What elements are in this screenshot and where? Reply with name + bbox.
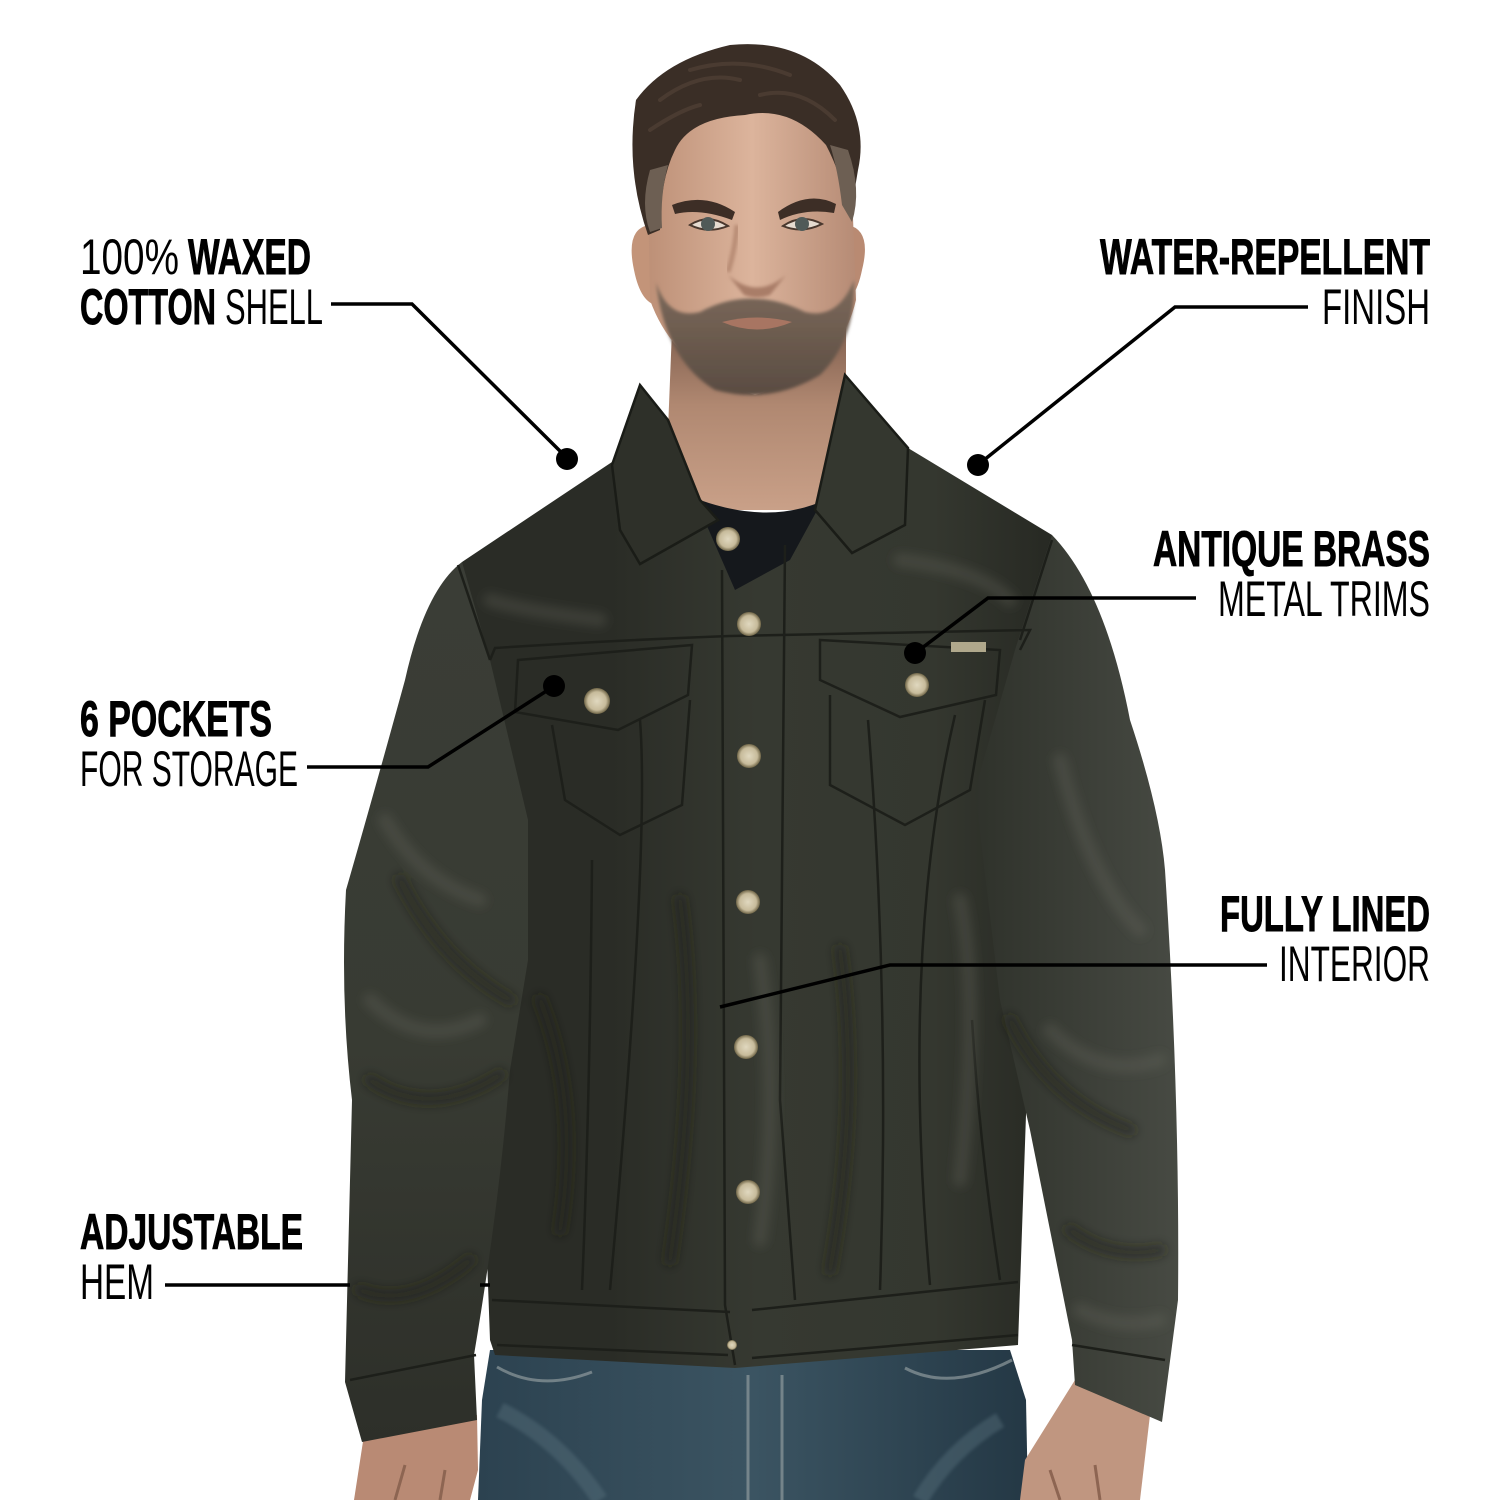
callout: 100% waxed cotton shell: COTTON: [80, 279, 216, 335]
callout: adjustable hem: [80, 1204, 490, 1310]
nose: [728, 225, 786, 298]
callout: 100% waxed cotton shell: [80, 229, 578, 470]
brand tag: [951, 642, 986, 652]
callout: antique brass metal trims: [904, 521, 1430, 664]
callout: adjustable hem: ADJUSTABLE: [80, 1204, 303, 1260]
hair: [632, 44, 861, 235]
right sleeve: [975, 535, 1178, 1422]
callout: fully lined interior: [720, 886, 1430, 1007]
yoke, placket and pocket stitching: [350, 540, 1165, 1380]
left sleeve: [344, 562, 528, 1442]
hands: [354, 1380, 1150, 1500]
callout: 6 pockets for storage: 6 POCKETS: [80, 691, 272, 747]
callout: 6 pockets for storage: [80, 675, 565, 797]
eyes and brows: [672, 199, 836, 231]
callout: water-repellent finish: [967, 229, 1430, 476]
callout: 100% waxed cotton shell: 100%: [80, 229, 179, 285]
collar: [612, 375, 908, 564]
callout: water-repellent finish: FINISH: [1322, 279, 1430, 335]
jeans: [478, 1350, 1028, 1500]
ears: [632, 225, 865, 306]
illustration: man wearing waxed jacket: [344, 44, 1178, 1500]
brass buttons: [584, 527, 929, 1350]
neck: [668, 320, 846, 510]
callout: 100% waxed cotton shell: SHELL: [225, 279, 323, 335]
jacket body: [462, 448, 1052, 1368]
callout: 6 pockets for storage: FOR STORAGE: [80, 741, 298, 797]
mouth: [722, 318, 792, 330]
t-shirt: [700, 500, 825, 610]
jacket fabric folds: [360, 560, 1160, 1323]
callout: 100% waxed cotton shell: WAXED: [188, 229, 311, 285]
beard: [656, 280, 854, 395]
callout: adjustable hem: HEM: [80, 1254, 154, 1310]
face: [648, 105, 856, 395]
